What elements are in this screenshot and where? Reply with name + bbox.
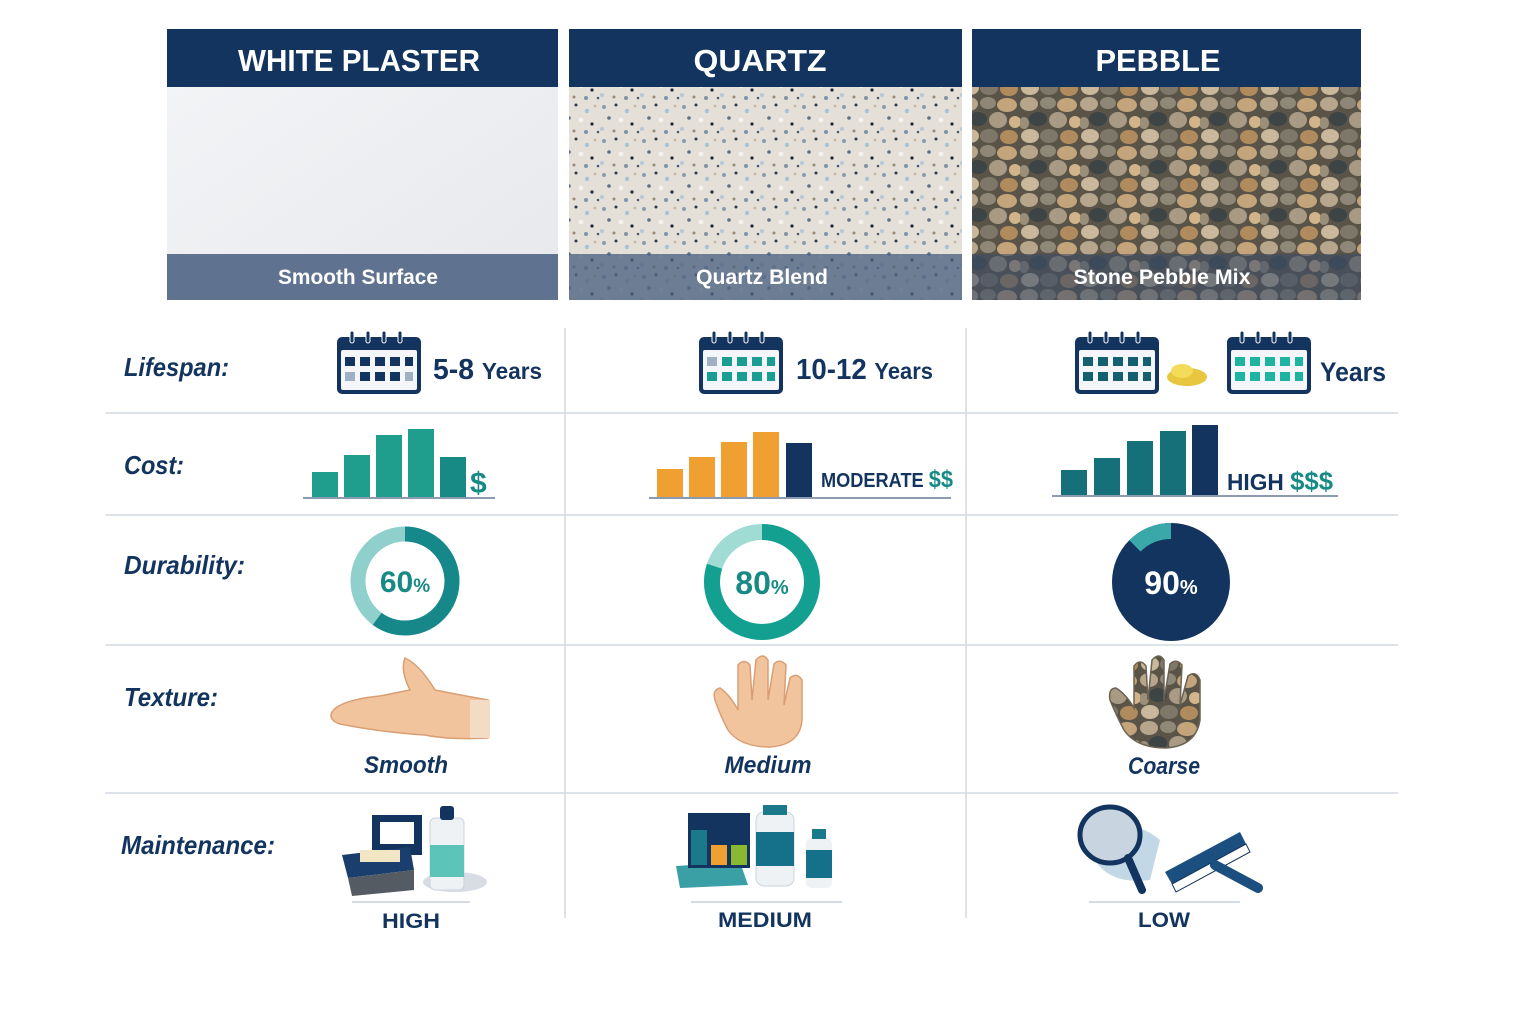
- lifespan: pebble: [1075, 331, 1386, 394]
- panel: white plaster header: [167, 29, 558, 300]
- durability: 90%: [1099, 510, 1243, 654]
- durability: 80%: 80%: [735, 565, 789, 601]
- texture: smooth hand: [331, 658, 490, 779]
- cost: white plaster: [303, 429, 495, 500]
- row labels: [121, 352, 275, 860]
- maintenance: low: LOW: [1138, 909, 1190, 932]
- row labels: Durability:: [124, 550, 245, 580]
- maintenance: high: [342, 806, 487, 933]
- durability: 90%: 90%: [1144, 565, 1198, 601]
- durability: 60%: [358, 534, 452, 628]
- cost: pebble: HIGH $$$: [1227, 466, 1334, 496]
- texture: smooth hand: Smooth: [364, 752, 448, 779]
- lifespan: white plaster: 5-8 Years: [433, 354, 542, 386]
- heading: pebble: PEBBLE: [1096, 43, 1220, 78]
- cost: pebble: [1052, 425, 1338, 496]
- caption: stone pebble mix: Stone Pebble Mix: [1074, 266, 1251, 289]
- maintenance: high: HIGH: [382, 910, 440, 933]
- texture: coarse hand: [1110, 656, 1200, 780]
- row labels: Maintenance:: [121, 830, 275, 860]
- heading: white plaster: WHITE PLASTER: [238, 43, 480, 78]
- panel: pebble header: [972, 29, 1361, 300]
- cost: quartz: MODERATE $$: [821, 466, 954, 493]
- row labels: Texture:: [124, 682, 218, 712]
- panel: quartz header: [569, 29, 962, 300]
- maintenance: low: [1080, 807, 1258, 932]
- maintenance: medium: [676, 805, 842, 932]
- texture: medium hand: [714, 656, 812, 779]
- row labels: Lifespan:: [124, 352, 229, 382]
- caption: smooth surface: Smooth Surface: [278, 266, 438, 289]
- row labels: Cost:: [124, 450, 184, 480]
- lifespan: quartz: [699, 331, 933, 394]
- lifespan: white plaster: [337, 331, 542, 394]
- caption: quartz blend: Quartz Blend: [696, 266, 828, 289]
- lifespan: pebble: Years: [1320, 357, 1386, 387]
- heading: quartz: QUARTZ: [694, 43, 827, 78]
- maintenance: medium: MEDIUM: [718, 909, 812, 932]
- durability: 60%: 60%: [380, 566, 430, 599]
- cost: white plaster: $: [470, 467, 487, 500]
- texture: medium hand: Medium: [724, 752, 812, 779]
- durability: 80%: [712, 532, 812, 632]
- texture: coarse hand: Coarse: [1128, 753, 1200, 780]
- cost: quartz: [649, 432, 954, 498]
- lifespan: quartz: 10-12 Years: [796, 354, 933, 386]
